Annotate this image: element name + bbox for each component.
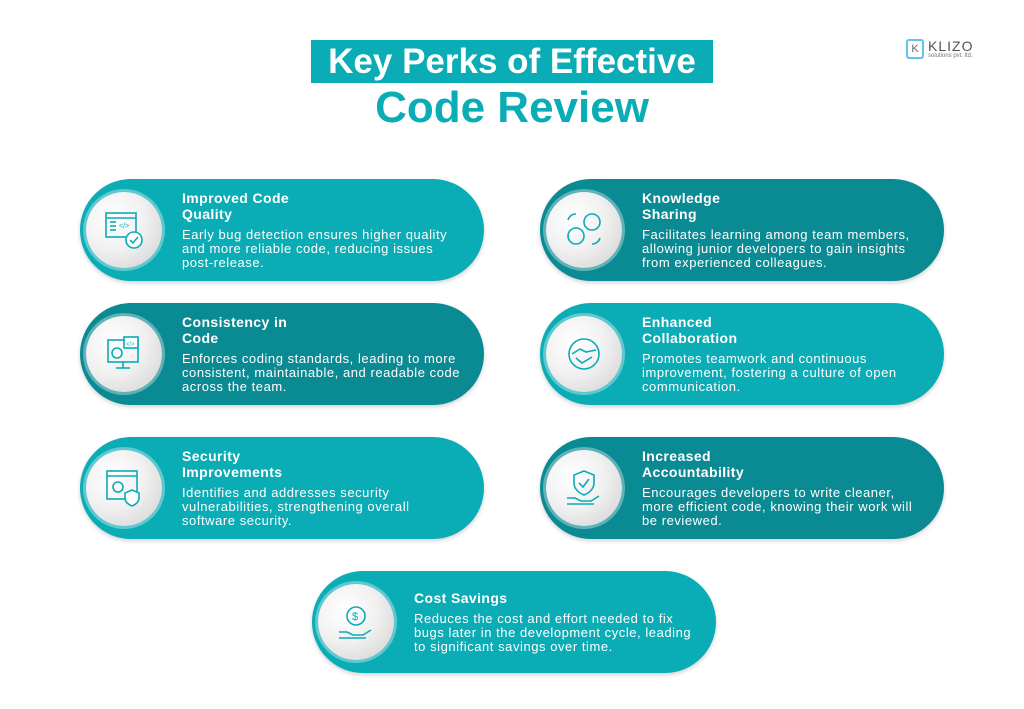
text: Quality — [182, 206, 232, 222]
panel: improved code quality — [80, 179, 484, 281]
panel: knowledge sharing — [540, 179, 944, 281]
text: Consistency in — [182, 314, 287, 330]
text — [182, 190, 447, 270]
title line 2: Code Review — [375, 83, 649, 132]
icon: hand coin — [318, 584, 394, 660]
text: Encourages developers to write cleaner, — [642, 485, 895, 500]
text: consistent, maintainable, and readable code — [182, 365, 460, 380]
text: and more reliable code, reducing issues — [182, 241, 433, 256]
text: more efficient code, knowing their work will — [642, 499, 912, 514]
text: from experienced colleagues. — [642, 255, 827, 270]
text: allowing junior developers to gain insights — [642, 241, 906, 256]
icon: hand coin: $ — [352, 611, 358, 623]
panel: cost savings — [312, 571, 716, 673]
text: Identifies and addresses security — [182, 485, 389, 500]
text: post-release. — [182, 255, 264, 270]
logo: solutions pvt. ltd. — [928, 53, 973, 59]
text: Enforces coding standards, leading to more — [182, 351, 456, 366]
icon: monitor gear: </> — [126, 342, 135, 348]
panel: increased accountability — [540, 437, 944, 539]
text: Enhanced — [642, 314, 712, 330]
text: communication. — [642, 379, 741, 394]
icon: code window — [86, 192, 162, 268]
text: across the team. — [182, 379, 287, 394]
text: Improvements — [182, 464, 282, 480]
text: improvement, fostering a culture of open — [642, 365, 897, 380]
text — [642, 448, 912, 528]
title — [311, 40, 713, 132]
text: Sharing — [642, 206, 697, 222]
text: to significant savings over time. — [414, 639, 613, 654]
text: software security. — [182, 513, 292, 528]
text: Code — [182, 330, 219, 346]
text: Accountability — [642, 464, 744, 480]
title line 1: Key Perks of Effective — [328, 42, 696, 81]
icon: monitor gear — [86, 316, 162, 392]
icon: handshake — [546, 316, 622, 392]
icon: heads — [546, 192, 622, 268]
text: Early bug detection ensures higher quality — [182, 227, 447, 242]
panel: consistency in code — [80, 303, 484, 405]
text — [642, 314, 897, 394]
text: Facilitates learning among team members, — [642, 227, 910, 242]
panel: security improvements — [80, 437, 484, 539]
text: vulnerabilities, strengthening overall — [182, 499, 410, 514]
text: Improved Code — [182, 190, 289, 206]
text: Reduces the cost and effort needed to fix — [414, 611, 673, 626]
text: Cost Savings — [414, 590, 508, 606]
text: bugs later in the development cycle, leading — [414, 625, 691, 640]
text: Knowledge — [642, 190, 720, 206]
text — [414, 590, 691, 654]
logo: K — [911, 43, 919, 55]
text: Promotes teamwork and continuous — [642, 351, 867, 366]
text: Increased — [642, 448, 711, 464]
logo: KLIZO — [928, 38, 973, 54]
icon: code window: </> — [119, 223, 129, 230]
panel: enhanced collaboration — [540, 303, 944, 405]
text: Security — [182, 448, 240, 464]
text — [182, 314, 460, 394]
icon: window shield — [86, 450, 162, 526]
icon: hand shield — [546, 450, 622, 526]
text: be reviewed. — [642, 513, 722, 528]
text: Collaboration — [642, 330, 737, 346]
text — [642, 190, 910, 270]
logo — [906, 38, 973, 59]
text — [182, 448, 410, 528]
